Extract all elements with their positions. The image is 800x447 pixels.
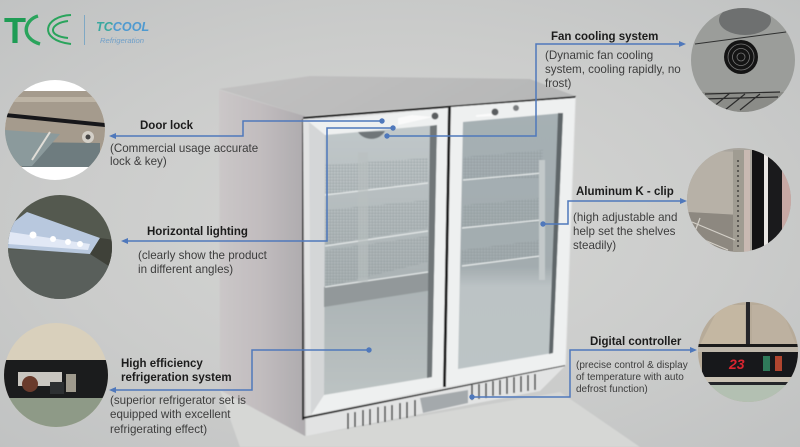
controller arrow (472, 350, 693, 397)
photo: digital controller (698, 302, 798, 402)
cabinet side (219, 90, 305, 436)
cabinet top (219, 76, 575, 116)
photo: aluminum k-clip (687, 148, 791, 252)
callout: horizontal lighting: (clearly show the product (138, 249, 268, 262)
callout: aluminum k-clip: help set the shelves (573, 225, 676, 238)
callout: aluminum k-clip: steadily) (573, 239, 616, 252)
refrigeration arrow (114, 350, 369, 390)
callout: horizontal lighting (138, 226, 268, 276)
callout: refrigeration system: High efficiency (121, 358, 203, 370)
k-clip arrow (543, 201, 682, 224)
control panel (420, 390, 468, 413)
right shelves (463, 150, 543, 180)
callout: aluminum k-clip: (high adjustable and (573, 211, 677, 224)
callout: digital controller (576, 336, 688, 395)
lighting arrow (126, 128, 393, 241)
callout: refrigeration system (110, 358, 246, 436)
left handle (398, 115, 433, 125)
left glass (324, 125, 437, 395)
photo: digital controller: 23 (728, 356, 745, 372)
callout: fan cooling: Fan cooling system (551, 31, 658, 43)
callout: aluminum k-clip: Aluminum K - clip (576, 186, 674, 198)
callout: door lock (110, 120, 258, 168)
callout: horizontal lighting: in different angles) (138, 263, 233, 276)
callout: aluminum k-clip (573, 186, 677, 252)
callout: horizontal lighting: Horizontal lighting (147, 226, 248, 238)
callout: fan cooling: frost) (545, 77, 572, 90)
right door (446, 98, 575, 387)
plinth vents (348, 374, 535, 429)
fan arrow (387, 44, 682, 136)
callout: refrigeration system: refrigerating effect) (110, 423, 207, 436)
logo: TCC / TCCOOL Refrigeration (4, 10, 149, 51)
right handle (476, 113, 495, 117)
arrowheads (109, 41, 697, 400)
left door (309, 108, 448, 415)
callout: digital controller: Digital controller (590, 336, 682, 348)
floor shadow (220, 390, 640, 447)
logo: TCC / TCCOOL Refrigeration: TCCOOL (96, 20, 149, 34)
photo: horizontal lighting (8, 195, 112, 299)
callout: refrigeration system: (superior refrigerator set is (110, 394, 246, 407)
cabinet front (303, 96, 576, 436)
callout: fan cooling: system, cooling rapidly, no (545, 63, 681, 76)
callout lines and arrows (109, 41, 697, 400)
refrigerator (219, 76, 640, 447)
callout: fan cooling (545, 31, 681, 90)
photo: refrigeration system (4, 323, 108, 427)
callout: door lock: lock & key) (110, 155, 167, 168)
photo: door lock (5, 80, 105, 180)
photo: fan (691, 8, 795, 112)
logo: TCC / TCCOOL Refrigeration: T (4, 10, 26, 51)
fan housing (358, 131, 385, 139)
right glass (458, 113, 563, 369)
callout: door lock: (Commercial usage accurate (110, 142, 258, 155)
callout: refrigeration system: refrigeration system (121, 372, 232, 384)
callout: fan cooling: (Dynamic fan cooling (545, 49, 653, 62)
divider (443, 107, 451, 387)
callout: digital controller: (precise control & display (576, 360, 688, 371)
callout: digital controller: defrost function) (576, 384, 648, 395)
callout: refrigeration system: equipped with excellent (110, 408, 231, 421)
callout: door lock: Door lock (140, 120, 194, 132)
left shelves (325, 158, 428, 195)
callout: digital controller: of temperature with auto (576, 372, 684, 383)
logo: TCC / TCCOOL Refrigeration: Refrigeration (100, 36, 144, 45)
door lock arrow (114, 121, 382, 136)
